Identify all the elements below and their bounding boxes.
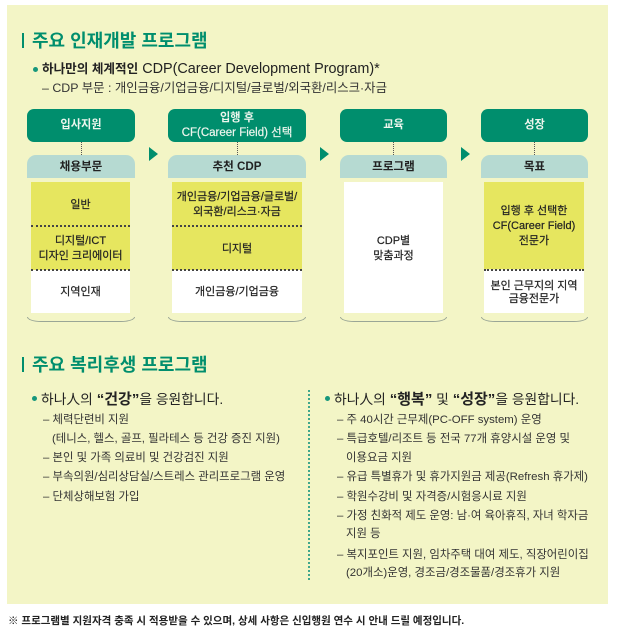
cell: personal corporate: 개인금융/기업금융: [195, 286, 279, 298]
panel: happiness and growth: – 특급호텔/리조트 등 전국 77개 휴양시설 운영 및: [337, 433, 570, 445]
header: 입사지원: [60, 119, 102, 131]
column 2 header: 입행 후: [220, 112, 254, 124]
cell: regional expert: [484, 270, 584, 313]
column 4 header: [481, 109, 588, 142]
cell: digital: 디지털: [222, 242, 252, 254]
cell: personal corporate: [172, 270, 302, 313]
text block: CDP intro: [33, 61, 387, 95]
arrow 3: [461, 147, 470, 161]
health title: 하나人의 “건강”을 응원합니다.: [41, 391, 223, 408]
cell: regional expert: 금융전문가: [509, 292, 559, 304]
cell: regional: 지역인재: [60, 286, 101, 298]
divider: [308, 390, 310, 580]
footnote: ※ 프로그램별 지원자격 충족 시 적용받을 수 있으며, 상세 사항은 신입행원 연수 시 안내 드릴 예정입니다.: [8, 615, 464, 627]
cell: digital ICT: 디자인 크리에이터: [38, 250, 122, 262]
happiness title: 하나人의 “행복” 및 “성장”을 응원합니다.: [334, 391, 579, 408]
happiness items: – 주 40시간 근무제(PC-OFF system) 운영: [337, 414, 542, 426]
CDP title: 하나만의 체계적인 CDP(Career Development Program)*: [42, 61, 380, 77]
cell: CF expert: CF(Career Field): [493, 220, 575, 232]
subheader: goal: 목표: [524, 160, 545, 173]
subheader: recommended CDP: [168, 155, 306, 178]
cell: CDP courses: [344, 182, 443, 313]
connector 1: [81, 142, 82, 155]
column 3 header: [340, 109, 447, 142]
panel: happiness and growth: 지원 등: [346, 528, 381, 540]
panel: health: – 부속의원/심리상담실/스트레스 관리프로그램 운영: [43, 471, 285, 483]
panel: happiness and growth: [325, 391, 589, 579]
panel: health: (테니스, 헬스, 골프, 필라테스 등 건강 증진 지원): [52, 433, 280, 445]
panel: health: – 본인 및 가족 의료비 및 건강검진 지원: [43, 452, 229, 464]
bullet: [325, 396, 330, 401]
column 2 header: [168, 109, 306, 142]
column 4 header: 성장: [524, 119, 545, 131]
panel: happiness and growth: 이용요금 지원: [346, 452, 412, 464]
subheader: program: 프로그램: [372, 160, 415, 173]
arrow 1: [149, 147, 158, 161]
bullet: [33, 67, 38, 72]
cell: finance list: 개인금융/기업금융/글로벌/: [177, 191, 297, 203]
panel: health: [32, 391, 285, 503]
bullet: [32, 396, 37, 401]
cell: general: 일반: [70, 198, 91, 210]
panel: happiness and growth: – 복지포인트 지원, 임차주택 대여 제도, 직장어린이집: [337, 549, 589, 561]
subheader: program: [340, 155, 447, 178]
cell: digital ICT: [31, 226, 130, 270]
subheader: hiring: [27, 155, 135, 178]
subheader: hiring: 채용부문: [60, 160, 102, 173]
subheader: goal: [481, 155, 588, 178]
panel: happiness and growth: (20개소)운영, 경조금/경조물품/경조휴가 지원: [346, 567, 560, 579]
cell: regional: [31, 270, 130, 313]
cell: digital: [172, 226, 302, 270]
panel: health: – 단체상해보험 가입: [43, 491, 140, 503]
cell: general: [31, 182, 130, 226]
cell: CDP courses: CDP별: [377, 234, 410, 246]
health items: – 체력단련비 지원: [43, 414, 129, 426]
cell: CF expert: [484, 182, 584, 269]
cell: digital ICT: 디지털/ICT: [55, 235, 106, 247]
cell: finance list: 외국환/리스크·자금: [193, 206, 281, 218]
header: [27, 109, 135, 142]
panel: happiness and growth: – 가정 친화적 제도 운영: 남·여 육아휴직, 자녀 학자금: [337, 510, 588, 522]
cell: CDP courses: 맞춤과정: [373, 250, 414, 262]
arrow 2: [320, 147, 329, 161]
cell: regional expert: 본인 근무지의 지역: [490, 280, 578, 292]
column 2 header: CF(Career Field) 선택: [182, 126, 292, 138]
cell: finance list: [172, 182, 302, 226]
panel: happiness and growth: – 유급 특별휴가 및 휴가지원금 제공(Refresh 휴가제): [337, 471, 588, 483]
heading: welfare programs: 주요 복리후생 프로그램: [32, 355, 208, 375]
panel: happiness and growth: – 학원수강비 및 자격증/시험응시료 지원: [337, 491, 527, 503]
CDP sections: – CDP 부문 : 개인금융/기업금융/디지털/글로벌/외국환/리스크·자금: [42, 81, 387, 95]
column 3 header: 교육: [383, 119, 404, 131]
heading: talent development programs: 주요 인재개발 프로그램: [32, 31, 208, 51]
subheader: recommended CDP: 추천 CDP: [212, 160, 262, 173]
cell: CF expert: 입행 후 선택한: [501, 205, 567, 217]
cell: CF expert: 전문가: [519, 235, 549, 247]
